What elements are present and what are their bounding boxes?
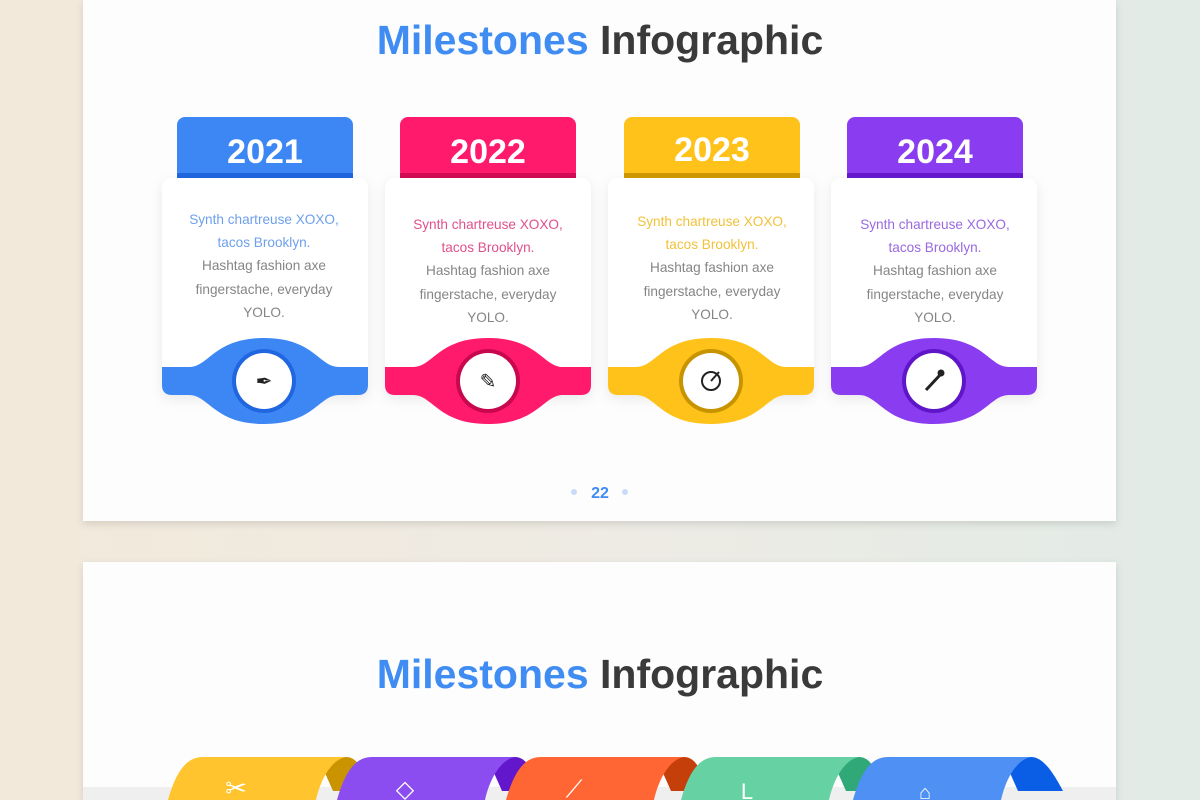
title: Milestones Infographic <box>377 17 823 63</box>
card: 2024: tacos Brooklyn. <box>889 240 981 255</box>
card: 2021: 2021 <box>227 133 303 171</box>
card: 2021: ✒ <box>256 371 272 393</box>
card: 2022: ✎ <box>480 371 496 393</box>
panel: slide 1 <box>83 0 1116 521</box>
card: 2023: tacos Brooklyn. <box>666 237 758 252</box>
card: 2022: tacos Brooklyn. <box>442 240 534 255</box>
card: 2022: Synth chartreuse XOXO, <box>413 217 563 232</box>
card: 2023 <box>608 117 814 424</box>
card: 2021 <box>162 117 368 424</box>
card: 2024: YOLO. <box>914 310 956 325</box>
card: 2021: Hashtag fashion axe <box>202 258 326 273</box>
card: 2023: YOLO. <box>691 307 733 322</box>
card: 2024: fingerstache, everyday <box>867 287 1004 302</box>
page number: 22 <box>591 485 609 502</box>
card: 2021: Synth chartreuse XOXO, <box>189 212 339 227</box>
card: 2024: 2024 <box>897 133 973 171</box>
card: 2021: fingerstache, everyday <box>196 282 333 297</box>
card: 2024: Synth chartreuse XOXO, <box>860 217 1010 232</box>
card: 2022 <box>385 117 591 424</box>
page number <box>571 485 628 502</box>
card: 2023: fingerstache, everyday <box>644 284 781 299</box>
card: 2022: YOLO. <box>467 310 509 325</box>
card: 2022: Hashtag fashion axe <box>426 263 550 278</box>
panel: slide 2 <box>83 562 1116 800</box>
title 2: Milestones Infographic <box>377 651 823 697</box>
ribbons <box>168 757 1063 800</box>
card: 2024: Hashtag fashion axe <box>873 263 997 278</box>
card: 2022: fingerstache, everyday <box>420 287 557 302</box>
card: 2023: 2023 <box>674 131 750 169</box>
card: 2022: 2022 <box>450 133 526 171</box>
card: 2024 <box>831 117 1037 424</box>
card: 2021: tacos Brooklyn. <box>218 235 310 250</box>
card: 2023: Hashtag fashion axe <box>650 260 774 275</box>
card: 2021: YOLO. <box>243 305 285 320</box>
card: 2023: Synth chartreuse XOXO, <box>637 214 787 229</box>
